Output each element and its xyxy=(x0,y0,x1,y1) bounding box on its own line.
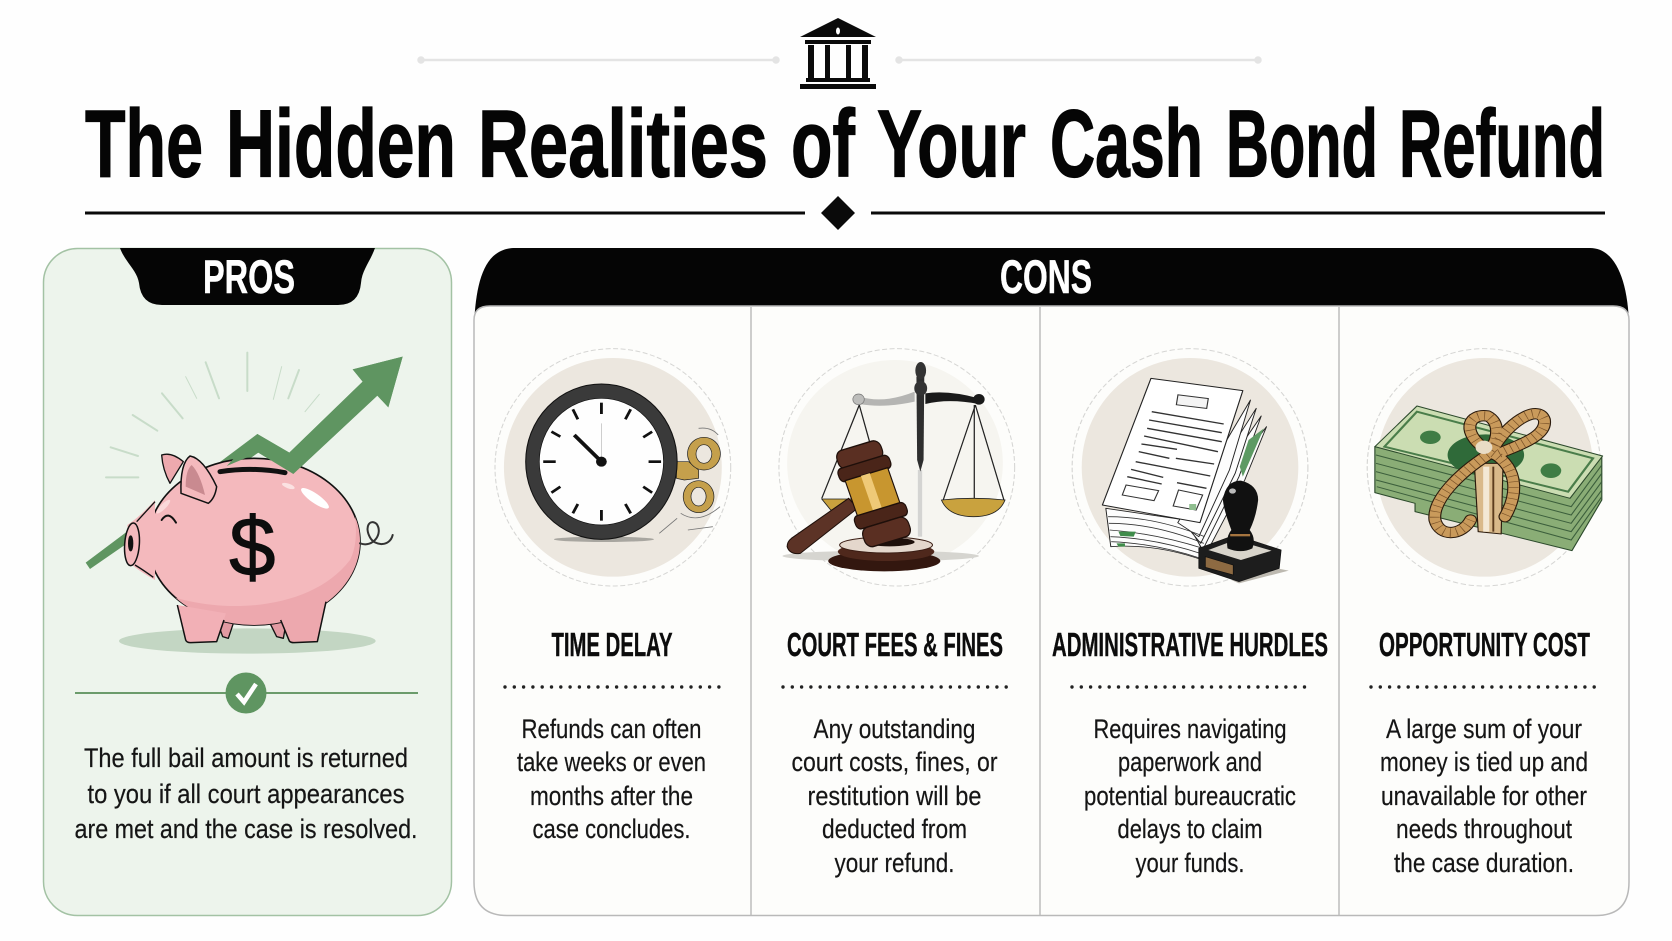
pros header tab: PROS xyxy=(203,250,295,303)
pros text: are met and the case is resolved. xyxy=(74,814,418,844)
title: Realities xyxy=(478,90,768,198)
title: Hidden xyxy=(226,90,456,198)
text: needs throughout xyxy=(1396,814,1573,844)
text: Refunds can often xyxy=(522,714,702,744)
title: The xyxy=(85,90,203,198)
text xyxy=(1084,714,1296,878)
dollar sign: $ xyxy=(229,501,276,594)
column: court fees and fines xyxy=(779,349,1015,878)
icon: money tied with rope xyxy=(1367,349,1603,586)
panel: cons xyxy=(474,248,1629,916)
heading: COURT FEES & FINES xyxy=(787,626,1003,663)
text: restitution will be xyxy=(808,781,982,811)
column: administrative hurdles xyxy=(1052,349,1328,878)
pros header tab xyxy=(120,248,375,305)
text: potential bureaucratic xyxy=(1084,781,1296,811)
icon: wind-up clock xyxy=(495,349,731,586)
text: your refund. xyxy=(834,848,954,878)
text: take weeks or even xyxy=(517,747,706,777)
text xyxy=(517,714,706,844)
icon: paperwork and stamp xyxy=(1072,349,1308,586)
pros text xyxy=(74,743,418,844)
text: paperwork and xyxy=(1118,747,1262,777)
title xyxy=(85,90,1605,198)
text xyxy=(792,714,998,878)
cons header: CONS xyxy=(1000,250,1092,303)
icon: courthouse xyxy=(800,18,876,89)
illustration: piggy bank with rising arrow xyxy=(86,353,403,654)
text: case concludes. xyxy=(532,814,690,844)
text: Requires navigating xyxy=(1094,714,1286,744)
pros text: to you if all court appearances xyxy=(88,779,404,809)
title: Bond xyxy=(1226,90,1378,198)
column: opportunity cost xyxy=(1367,349,1603,878)
text: A large sum of your xyxy=(1386,714,1582,744)
text: delays to claim xyxy=(1118,814,1262,844)
heading: ADMINISTRATIVE HURDLES xyxy=(1052,626,1328,663)
text: the case duration. xyxy=(1394,848,1574,878)
heading: TIME DELAY xyxy=(552,626,672,663)
check divider xyxy=(75,672,418,714)
text: unavailable for other xyxy=(1381,781,1587,811)
text xyxy=(1380,714,1588,878)
title: of xyxy=(791,90,856,198)
panel: pros xyxy=(44,248,452,916)
text: months after the xyxy=(530,781,693,811)
text: your funds. xyxy=(1136,848,1244,878)
text: court costs, fines, or xyxy=(792,747,998,777)
title divider xyxy=(85,196,1605,230)
cons header xyxy=(474,248,1629,325)
title: Your xyxy=(877,90,1026,198)
text: money is tied up and xyxy=(1380,747,1588,777)
text: Any outstanding xyxy=(814,714,976,744)
column: time delay xyxy=(495,349,731,844)
icon: gavel and scales xyxy=(779,349,1015,586)
title: Cash xyxy=(1050,90,1203,198)
pros text: The full bail amount is returned xyxy=(84,743,408,773)
text: deducted from xyxy=(822,814,967,844)
